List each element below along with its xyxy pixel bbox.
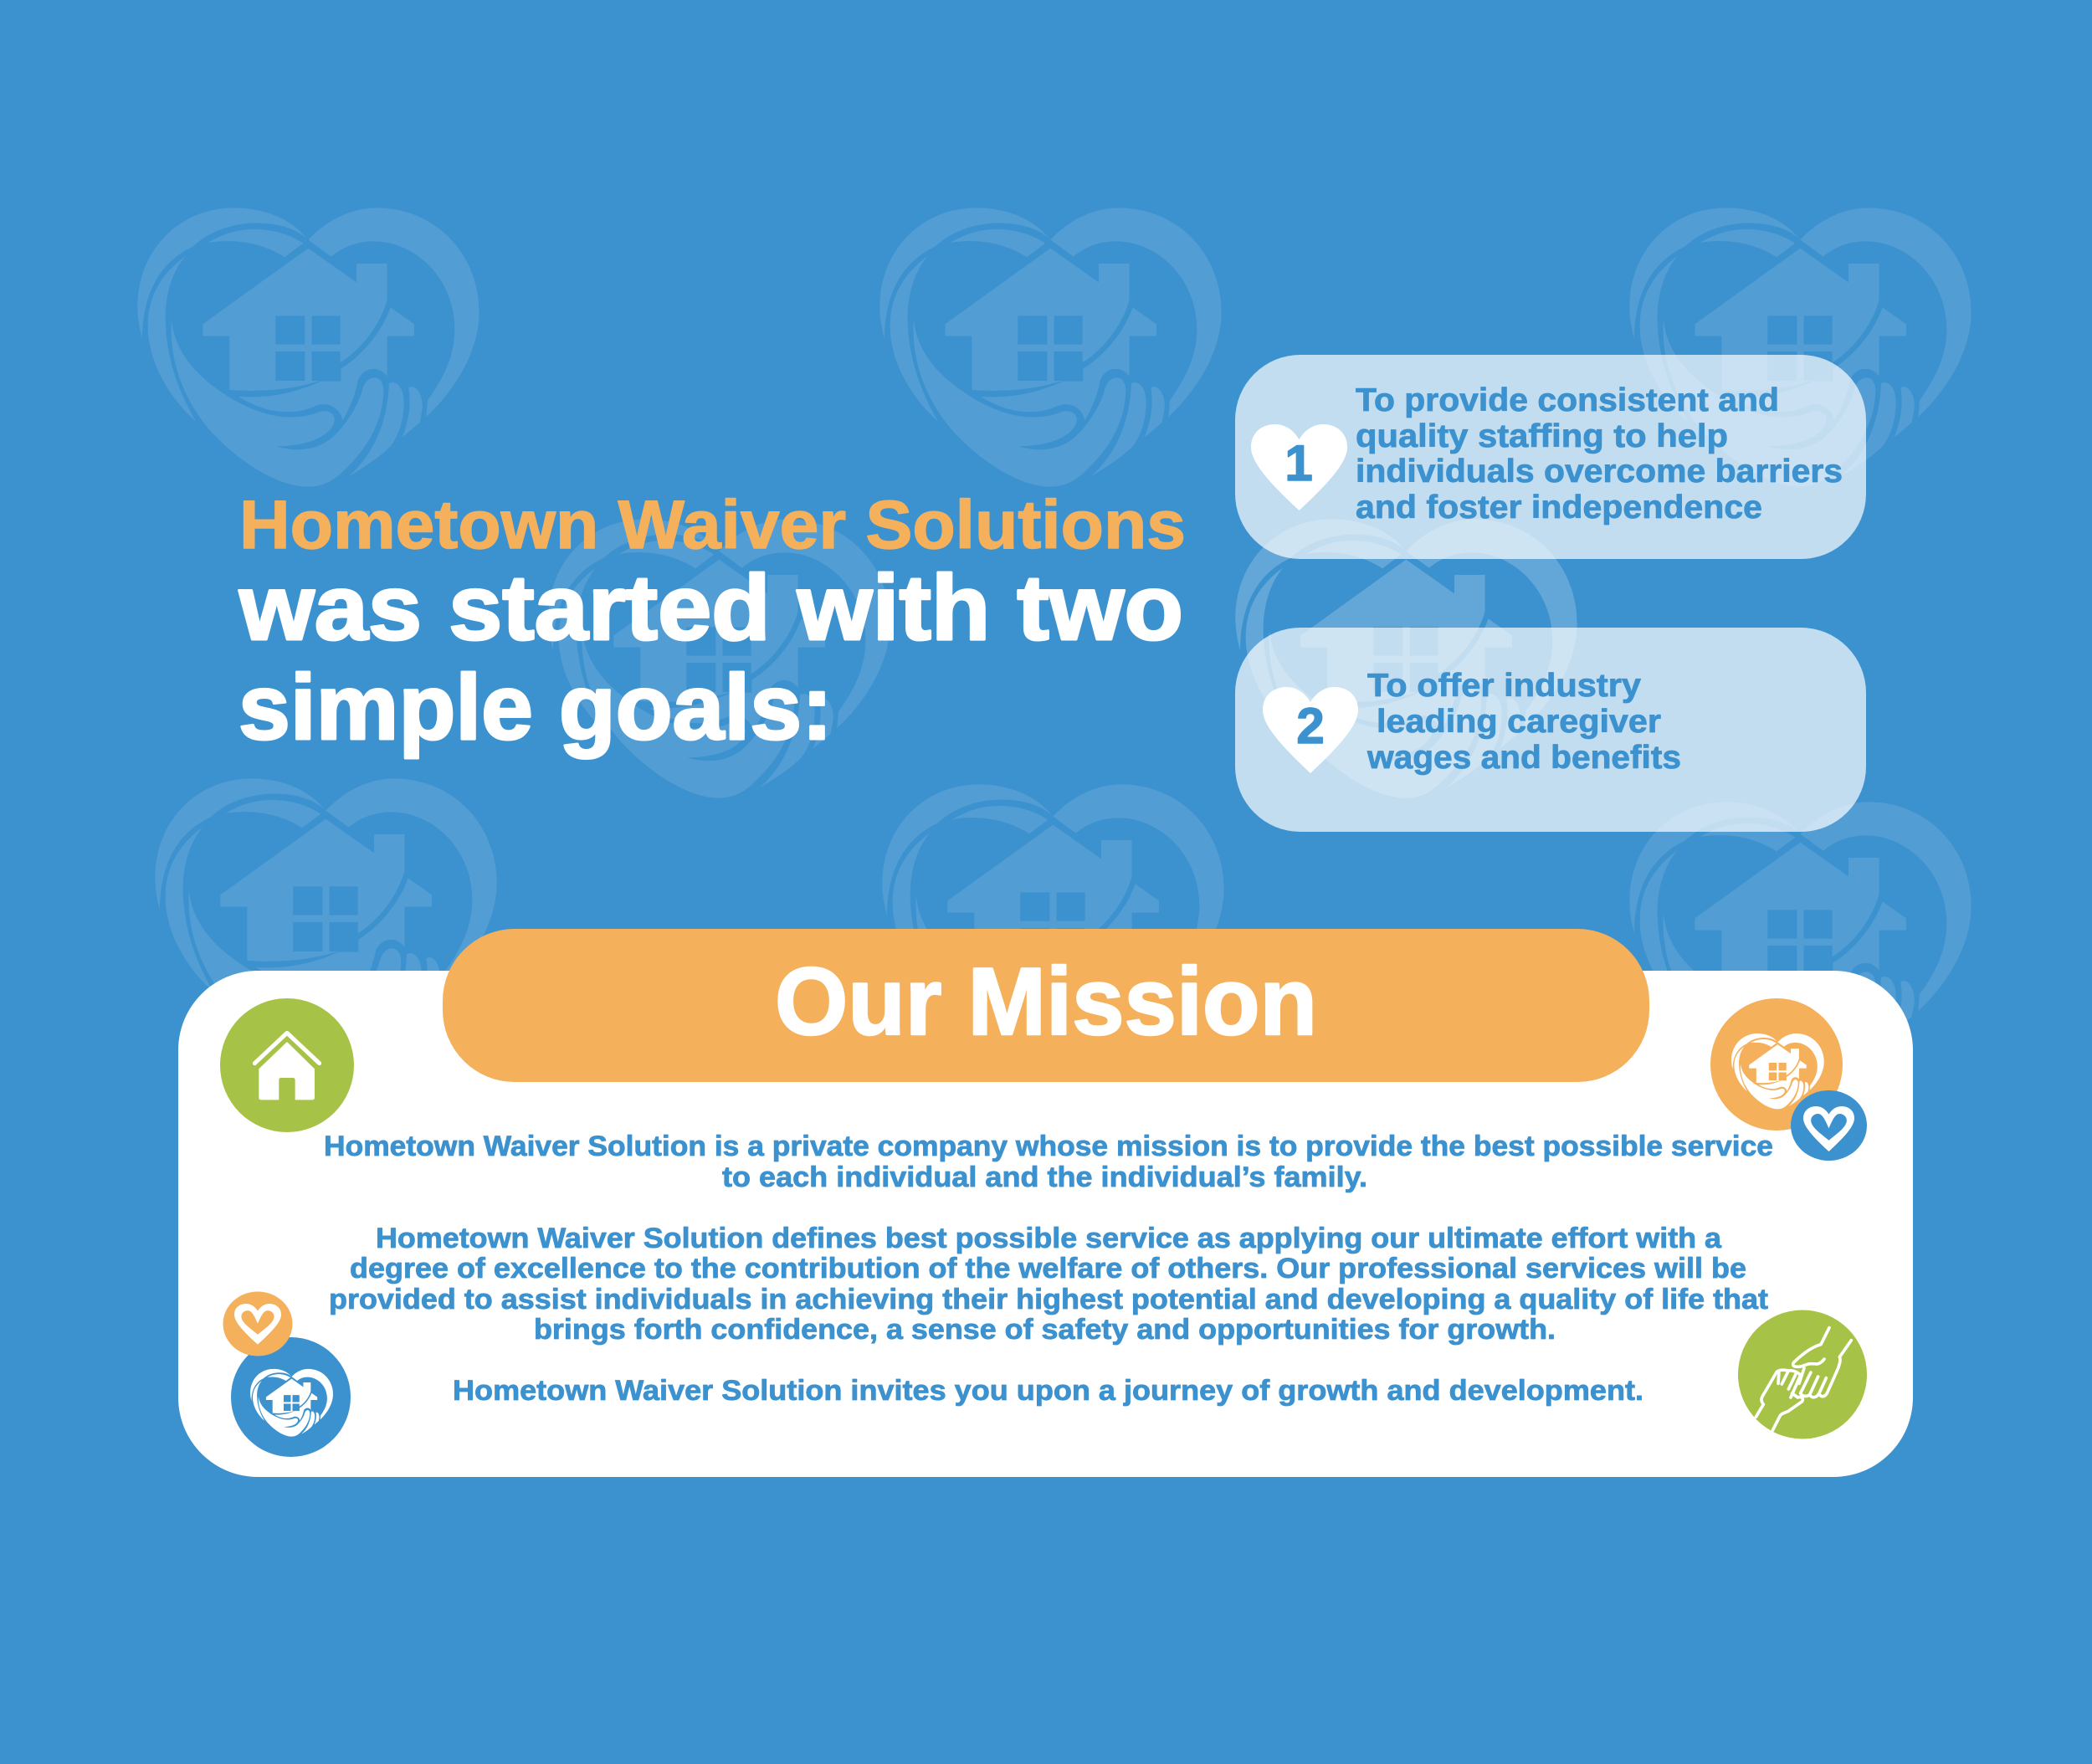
icon: house in green circle: [220, 998, 354, 1132]
heading: Our Mission banner: Our Mission: [775, 949, 1317, 1055]
icon: orange heart badge: [223, 1292, 293, 1356]
title line: was started with two: was started with two: [238, 556, 1183, 659]
text: goal 2: wages and benefits: [1366, 740, 1681, 776]
watermark logo: bright centre-right: [1235, 519, 1577, 798]
text: goal 1: and foster independence: [1356, 490, 1762, 526]
icon: logo in orange circle with blue heart badge: [1710, 998, 1867, 1161]
text: goal 2: To offer industry: [1367, 668, 1641, 704]
heading: Our Mission banner: [443, 929, 1649, 1082]
panel: goal 1: [1235, 355, 1866, 559]
text: goal 1: [1356, 382, 1843, 526]
icon: helping hands in green circle: [1738, 1310, 1867, 1439]
text: mission statement: degree of excellence to the contribution of the welfare of others. Our professional services will be: [350, 1253, 1746, 1285]
text: goal 1: To provide consistent and: [1356, 382, 1779, 418]
icon: heart number 1: 1: [1284, 435, 1313, 491]
text: goal 1: individuals overcome barriers: [1356, 454, 1843, 490]
icon: heart number 2: [1263, 687, 1358, 773]
title: [238, 487, 1186, 759]
text: mission statement: to each individual and the individual’s family.: [722, 1161, 1367, 1193]
watermark logos pattern: [137, 208, 1972, 1081]
title line: organisation name: Hometown Waiver Solutions: [239, 487, 1186, 563]
panel: goal 2: [1235, 628, 1866, 832]
text: goal 2: [1366, 668, 1681, 776]
panel: mission card: [178, 971, 1913, 1477]
text: mission statement: [324, 1131, 1773, 1407]
text: mission statement: provided to assist individuals in achieving their highest potential and developing a quality of life that: [329, 1284, 1768, 1315]
icon: logo in blue circle with orange heart badge: [223, 1292, 351, 1457]
icon: blue heart badge: [1791, 1090, 1867, 1161]
text: goal 2: leading caregiver: [1377, 704, 1661, 740]
text: mission statement: Hometown Waiver Solution invites you upon a journey of growth and development.: [453, 1375, 1643, 1407]
icon: heart number 2: 2: [1296, 698, 1325, 754]
text: mission statement: Hometown Waiver Solution defines best possible service as applying our ultimate effort with a: [376, 1223, 1722, 1254]
text: mission statement: Hometown Waiver Solution is a private company whose mission is to provide the best possible service: [324, 1131, 1773, 1162]
title line: simple goals: simple goals:: [238, 656, 833, 759]
text: goal 1: quality staffing to help: [1356, 418, 1728, 454]
text: mission statement: brings forth confidence, a sense of safety and opportunities for growth.: [534, 1314, 1556, 1346]
icon: heart number 1: [1251, 424, 1347, 510]
